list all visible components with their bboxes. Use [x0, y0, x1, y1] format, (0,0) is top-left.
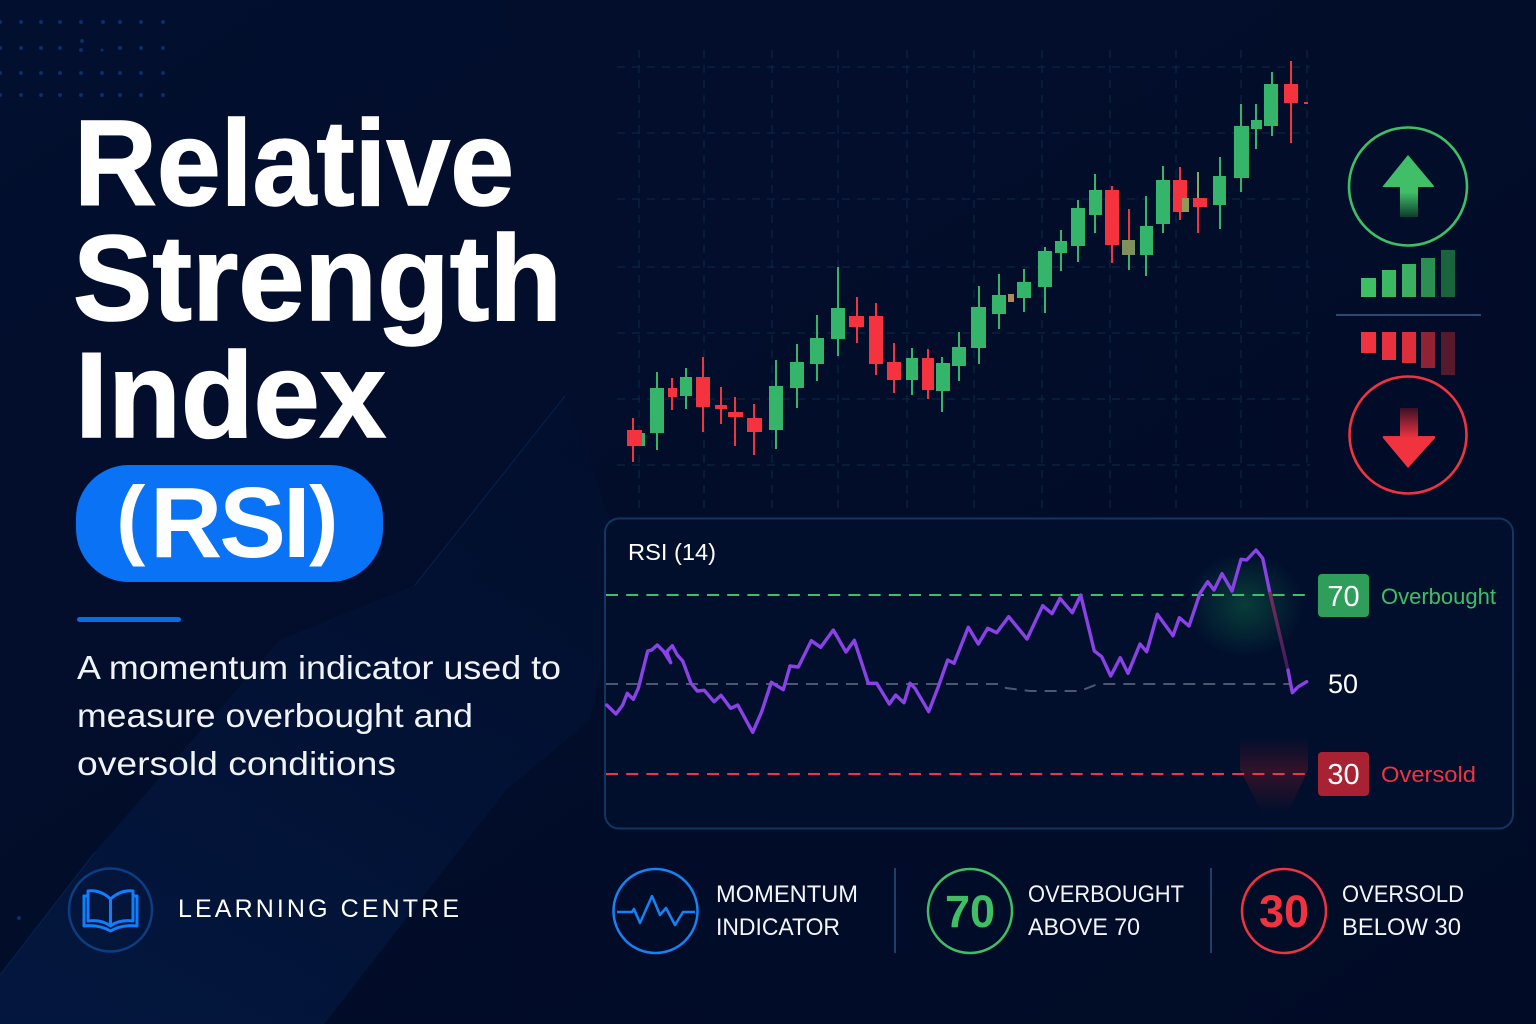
label — [1028, 881, 1184, 941]
icon: 70 ring — [928, 869, 1012, 953]
title: Relative — [74, 95, 514, 231]
heading: RSI (14): RSI (14) — [628, 539, 716, 565]
subtitle: A momentum indicator used to — [77, 649, 561, 686]
subtitle: oversold conditions — [77, 745, 396, 782]
decorative dot grid — [0, 20, 165, 920]
label: OVERSOLD — [1342, 881, 1464, 908]
title — [73, 95, 562, 463]
icon: up arrow — [1349, 128, 1467, 246]
legend: momentum indicator — [614, 869, 858, 953]
brand: learning centre — [69, 868, 459, 952]
overbought glow — [1187, 553, 1303, 657]
oversold glow — [1240, 738, 1308, 812]
icon: 30 ring — [1242, 869, 1326, 953]
title: Strength — [73, 210, 562, 346]
icon: 30 ring: 30 — [1259, 886, 1309, 937]
label — [1342, 881, 1464, 941]
label: LEARNING CENTRE — [178, 895, 459, 923]
bars: rising volume — [1361, 250, 1455, 297]
badge: RSI: RSI — [150, 467, 308, 579]
icon: down arrow — [1350, 376, 1466, 494]
label: BELOW 30 — [1342, 914, 1461, 941]
badge: RSI — [76, 465, 383, 582]
label: 30 oversold: 30 — [1327, 759, 1360, 791]
line: overbought 70 — [606, 594, 1311, 596]
label: 70 overbought: 70 — [1327, 581, 1360, 613]
legend: overbought above 70 — [928, 869, 1184, 953]
signal: bullish up — [1349, 128, 1467, 297]
label: MOMENTUM — [716, 881, 858, 908]
subtitle: measure overbought and — [77, 697, 473, 734]
label: OVERBOUGHT — [1028, 881, 1184, 908]
label — [716, 881, 858, 941]
subtitle — [77, 649, 561, 782]
line: midpoint 50 — [606, 684, 1290, 691]
label: 30 oversold — [1318, 752, 1476, 796]
signal: bearish down — [1350, 332, 1466, 494]
legend: oversold below 30 — [1242, 869, 1464, 953]
label: 70 overbought: Overbought — [1381, 584, 1496, 609]
bars: falling volume — [1361, 332, 1455, 375]
RSI line — [607, 550, 1307, 732]
panel: RSI chart — [605, 518, 1513, 828]
label: INDICATOR — [716, 914, 840, 941]
icon: book — [69, 868, 152, 952]
badge: RSI: ( — [116, 468, 146, 567]
label: ABOVE 70 — [1028, 914, 1140, 941]
label: 30 oversold: Oversold — [1381, 762, 1476, 787]
title: Index — [75, 327, 386, 463]
candlestick chart — [617, 50, 1310, 515]
icon: pulse — [614, 869, 698, 953]
line: oversold 30 — [606, 773, 1311, 775]
badge: RSI: ) — [309, 468, 338, 567]
accent rule — [77, 617, 181, 622]
icon: 70 ring: 70 — [945, 886, 995, 937]
label: 70 overbought — [1318, 574, 1496, 617]
label: 50: 50 — [1328, 669, 1358, 699]
